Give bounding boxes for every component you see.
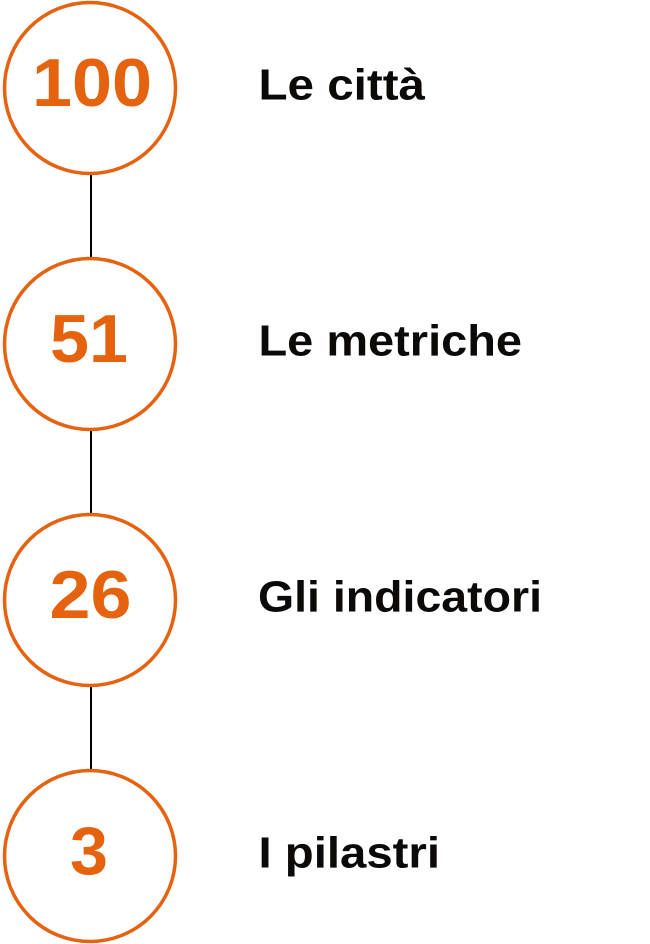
item: 51 Le metriche: Le metriche <box>258 316 522 366</box>
item: 100 Le città: 100 <box>32 45 152 121</box>
item: 3 I pilastri <box>4 770 440 942</box>
item: 26 Gli indicatori <box>4 514 542 686</box>
item: 3 I pilastri: I pilastri <box>258 828 440 878</box>
item: 3 I pilastri: 3 <box>70 813 108 889</box>
item: 100 Le città: Le città <box>258 60 426 110</box>
item: 51 Le metriche <box>4 258 522 430</box>
item: 26 Gli indicatori: Gli indicatori <box>258 572 542 622</box>
item: 51 Le metriche: 51 <box>50 301 128 377</box>
item: 100 Le città <box>4 2 426 174</box>
item: 26 Gli indicatori: 26 <box>50 557 132 633</box>
